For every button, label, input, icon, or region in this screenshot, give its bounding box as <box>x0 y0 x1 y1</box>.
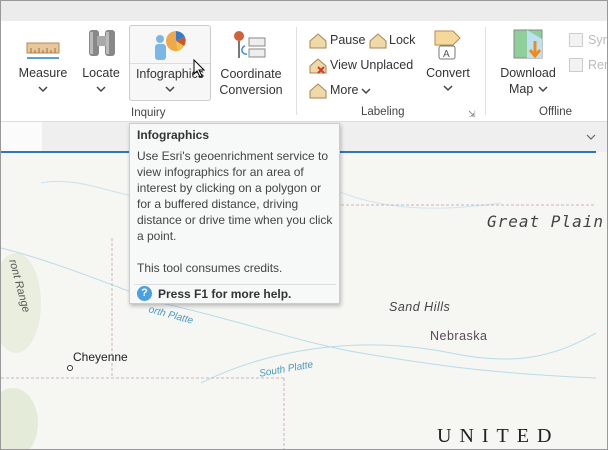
tool: infographics (hovered): Infographics <box>136 67 204 81</box>
help line: Press F1 for more help. <box>158 287 291 301</box>
offline group: Download <box>500 66 556 80</box>
tooltip <box>129 123 340 304</box>
labeling group: Pause <box>330 33 365 47</box>
map <box>1 180 596 449</box>
labeling group: ⇲ <box>468 109 476 119</box>
top bar <box>0 0 608 21</box>
offline group: Offline <box>539 106 572 118</box>
map labels: Great Plain <box>487 212 604 231</box>
tooltip body: Use Esri's geoenrichment service to view infographics for an area of interest by clicking on a polygon or for a buffered distance, driving distance or drive time when you click a point. <box>137 149 332 243</box>
ribbon <box>0 21 608 122</box>
map view header <box>0 122 608 152</box>
offline group: Map <box>509 82 533 96</box>
text: Cheyenne <box>73 350 128 364</box>
tool: coordinate conversion: Conversion <box>219 83 283 97</box>
cursor <box>194 59 206 78</box>
tool: coordinate conversion: Coordinate <box>220 67 282 81</box>
labeling group: Labeling <box>361 106 404 118</box>
text: Sand Hills <box>389 300 450 314</box>
text: UNITED <box>437 425 559 447</box>
tool: measure <box>19 42 67 92</box>
labeling group: More <box>330 83 358 97</box>
offline group: Rer <box>588 58 608 72</box>
tool: coordinate conversion <box>219 31 283 97</box>
tooltip body: This tool consumes credits. <box>137 261 282 275</box>
tool: locate: Locate <box>82 66 120 80</box>
offline group <box>500 30 608 118</box>
group label: inquiry: Inquiry <box>131 107 166 119</box>
tool: measure: Measure <box>19 66 67 80</box>
text: ront Range <box>6 258 32 314</box>
tooltip title: Infographics <box>137 128 209 142</box>
help line: ? <box>141 287 148 299</box>
text: orth Platte <box>147 304 194 327</box>
tool: infographics (hovered) <box>129 25 211 101</box>
convert: A <box>443 49 450 60</box>
labeling group: Lock <box>389 33 415 47</box>
text: South Platte <box>258 359 314 380</box>
labeling group: View Unplaced <box>330 58 413 72</box>
labeling group: Convert <box>426 66 470 80</box>
labeling group <box>310 30 476 119</box>
convert <box>434 30 461 60</box>
text: Nebraska <box>430 329 488 343</box>
tool: locate <box>82 30 120 92</box>
